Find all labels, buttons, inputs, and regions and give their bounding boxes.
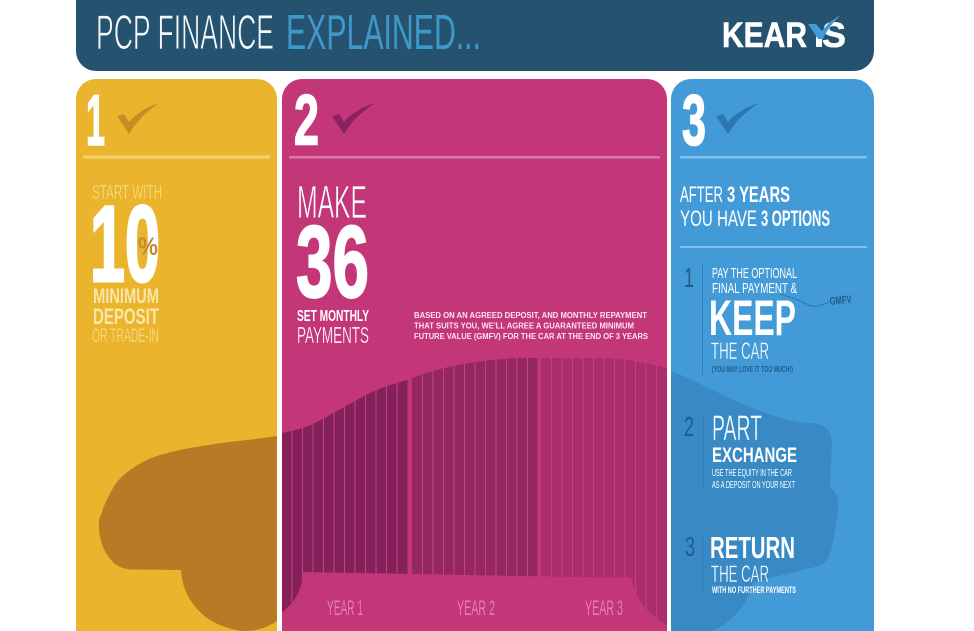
- option 1: keep: KEEP: [709, 290, 796, 346]
- text: make 36 set monthly payments: PAYMENTS: [297, 322, 369, 348]
- panel 2: monthly payments: [282, 79, 667, 631]
- text: start with 10% minimum deposit: 10: [90, 183, 160, 304]
- year labels: YEAR 1: [327, 597, 363, 620]
- option 3: return: RETURN: [710, 530, 795, 565]
- header bar: [76, 0, 874, 71]
- heading: after 3 years: AFTER: [680, 182, 723, 207]
- option 2: part exchange: [684, 409, 797, 491]
- payment bars shaped as car: [282, 350, 667, 631]
- icon: check mark: [716, 103, 759, 134]
- callout: GMFV: GMFV: [829, 294, 853, 308]
- option 3: return: WITH NO FURTHER PAYMENTS: [712, 585, 796, 596]
- title: PCP FINANCE: [96, 6, 274, 60]
- year labels: [327, 597, 623, 620]
- text: start with 10% minimum deposit: OR TRADE-IN: [92, 326, 159, 347]
- icon: check mark: [332, 103, 375, 134]
- text: guaranteed value explanation: THAT SUITS YOU, WE'LL AGREE A GUARANTEED MINIMUM: [414, 322, 634, 330]
- car silhouette front: [99, 436, 277, 631]
- step number 2: 2: [294, 82, 319, 160]
- option 1: keep: 1: [684, 262, 694, 293]
- option 1: keep: (YOU MAY LOVE IT TOO MUCH!): [712, 365, 793, 374]
- car silhouette rear: [671, 371, 838, 631]
- panel 1: deposit: 1: [86, 81, 105, 161]
- text: make 36 set monthly payments: SET MONTHLY: [297, 308, 369, 325]
- text: start with 10% minimum deposit: [90, 182, 162, 347]
- text: guaranteed value explanation: BASED ON AN AGREED DEPOSIT, AND MONTHLY REPAYMENT: [414, 311, 647, 320]
- text: make 36 set monthly payments: [296, 176, 369, 348]
- option 3: return: [685, 530, 796, 596]
- text: start with 10% minimum deposit: %: [138, 233, 158, 261]
- option 1: keep: PAY THE OPTIONAL: [712, 265, 797, 282]
- text: start with 10% minimum deposit: START WITH: [92, 182, 162, 204]
- option 1: keep: THE CAR: [711, 338, 769, 365]
- title: EXPLAINED...: [286, 6, 481, 60]
- option 2: part exchange: EXCHANGE: [712, 444, 797, 467]
- text: guaranteed value explanation: FUTURE VALUE (GMFV) FOR THE CAR AT THE END OF 3 YEARS: [414, 332, 649, 341]
- heading: after 3 years: YOU HAVE: [680, 206, 757, 231]
- logo: Kearys: S: [822, 16, 846, 55]
- logo: Kearys: KEAR: [722, 16, 807, 55]
- option 1: keep: FINAL PAYMENT &: [712, 280, 797, 297]
- step number 3: 3: [682, 82, 706, 160]
- option 2: part exchange: AS A DEPOSIT ON YOUR NEXT: [712, 480, 795, 491]
- text: make 36 set monthly payments: 36: [296, 205, 369, 319]
- text: guaranteed value explanation: [414, 311, 649, 341]
- year labels: YEAR 3: [585, 597, 623, 620]
- callout: GMFV: [780, 294, 853, 308]
- panel 1: deposit: [76, 79, 277, 631]
- panel 3: options: [671, 79, 874, 631]
- option 3: return: 3: [685, 531, 695, 562]
- heading: after 3 years: [680, 182, 830, 231]
- text: start with 10% minimum deposit: DEPOSIT: [93, 304, 159, 329]
- option 2: part exchange: PART: [712, 409, 762, 448]
- icon: check mark: [117, 103, 159, 134]
- heading: after 3 years: 3 YEARS: [727, 182, 790, 207]
- option 3: return: THE CAR: [711, 561, 769, 588]
- year labels: YEAR 2: [457, 597, 495, 620]
- text: make 36 set monthly payments: MAKE: [297, 176, 367, 228]
- text: start with 10% minimum deposit: MINIMUM: [93, 285, 159, 308]
- heading: after 3 years: 3 OPTIONS: [761, 206, 830, 231]
- option 2: part exchange: USE THE EQUITY IN THE CAR: [712, 468, 792, 479]
- option 2: part exchange: 2: [684, 411, 694, 442]
- option 1: keep: [684, 262, 853, 375]
